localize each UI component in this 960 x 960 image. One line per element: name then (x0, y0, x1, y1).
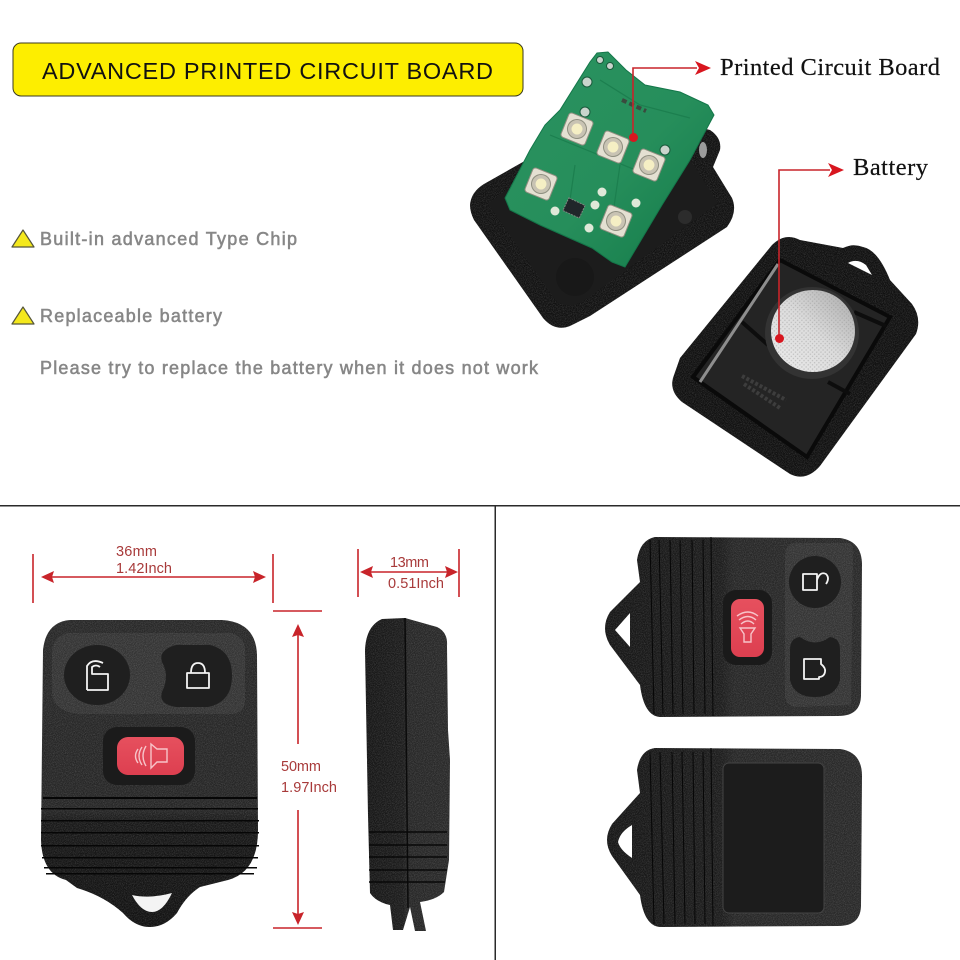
dimension: height 50mm: 50mm (281, 759, 321, 775)
board pins (580, 56, 670, 155)
panel: front view rotated (605, 537, 862, 717)
callout: printed circuit board (629, 54, 940, 142)
unlock button (64, 645, 130, 705)
lock button (790, 637, 840, 697)
panic button recess (723, 590, 772, 665)
rear shell (672, 237, 918, 477)
panel dividers (0, 505, 960, 960)
callout: battery: Battery (853, 154, 929, 181)
lock button (161, 645, 232, 707)
panic button (117, 737, 184, 775)
button recess (52, 633, 245, 714)
unlock button (789, 556, 841, 608)
solder pads (550, 188, 640, 232)
dimension: height 50mm (273, 611, 337, 928)
grip ribs (41, 797, 259, 874)
open shell (470, 125, 734, 328)
key ring hole (132, 893, 172, 912)
fob body (605, 537, 862, 717)
circuit board (505, 52, 714, 267)
dimension: depth 13mm (358, 549, 459, 597)
key ring hole (615, 613, 630, 647)
battery replacement note: Please try to replace the battery when it does not work (40, 358, 539, 378)
panel: back view (607, 748, 862, 927)
tactile switches (524, 112, 666, 238)
panic button recess (103, 727, 195, 785)
title banner (13, 43, 523, 96)
button recess (785, 543, 853, 707)
key ring hole (848, 261, 872, 275)
key ring hole (618, 825, 632, 858)
label recess (723, 763, 824, 913)
coin cell (765, 287, 859, 379)
dimension: width 36mm: 36mm (116, 544, 157, 560)
grip ribs (650, 748, 713, 926)
dimension: height 50mm: 1.97Inch (281, 780, 337, 796)
dimension: depth 13mm: 13mm (390, 555, 429, 571)
dimension: depth 13mm: 0.51Inch (388, 576, 444, 592)
grip ribs (650, 537, 713, 716)
dimension: width 36mm (33, 544, 273, 603)
side body (365, 618, 450, 931)
dimension: width 36mm: 1.42Inch (116, 561, 172, 577)
surface component (622, 100, 646, 111)
panel: front view with dimensions (41, 620, 259, 927)
side ribs (369, 832, 447, 882)
photo: open shell with circuit board (470, 52, 734, 328)
panel: side view (365, 618, 450, 931)
callout: printed circuit board: Printed Circuit Board (720, 54, 940, 81)
embossed shell marking (742, 376, 786, 408)
microchip (563, 198, 585, 218)
fob body (607, 748, 862, 927)
callout: battery (775, 154, 929, 343)
title banner: ADVANCED PRINTED CIRCUIT BOARD (42, 58, 493, 84)
fob body (41, 620, 258, 927)
photo: battery compartment (672, 237, 918, 477)
panic button (731, 599, 764, 657)
feature: replaceable battery: Replaceable battery (40, 306, 222, 326)
feature: built-in chip: Built-in advanced Type Chip (40, 229, 297, 249)
